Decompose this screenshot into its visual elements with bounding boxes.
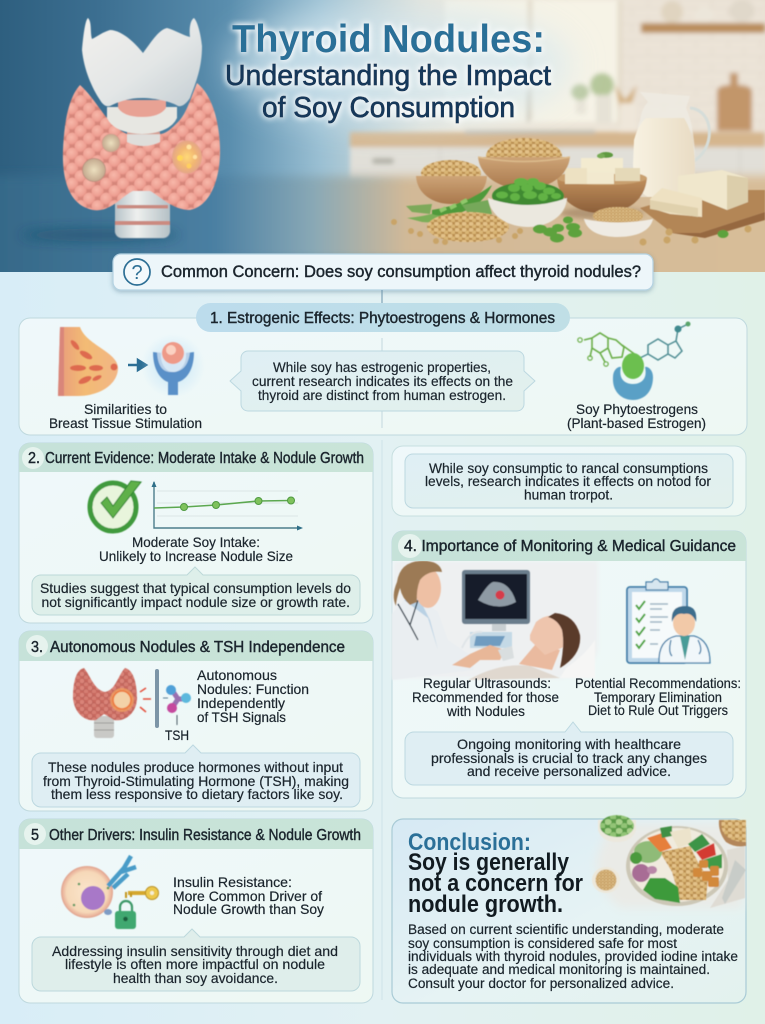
bean pile xyxy=(427,212,509,242)
panel 4: monitoring xyxy=(392,531,746,798)
panel: repeated soy note: While soy consumptic to rancal consumptions xyxy=(429,461,708,476)
callout: lifestyle is often more impactful on nodule xyxy=(65,957,325,972)
callout: These nodules produce hormones without input xyxy=(48,760,343,775)
icon: clipboard and doctor xyxy=(627,579,710,663)
callout xyxy=(32,567,360,615)
callout: health than soy avoidance. xyxy=(113,971,278,986)
heading 1: 1. Estrogenic Effects: Phytoestrogens & Hormones xyxy=(210,310,555,327)
heading 2 xyxy=(19,443,373,472)
heading 1 xyxy=(196,303,570,332)
hero image: thyroid and soy foods xyxy=(0,0,765,272)
panel: repeated soy note xyxy=(392,446,746,516)
monitor xyxy=(462,570,530,624)
label: insulin resistance: Insulin Resistance: xyxy=(173,875,292,890)
label: breast tissue: Similarities to xyxy=(84,402,167,417)
probe xyxy=(498,646,514,661)
callout xyxy=(32,929,360,991)
label: autonomous nodules: Independently xyxy=(197,696,285,711)
icon: breast tissue xyxy=(58,327,118,396)
pods xyxy=(406,185,492,222)
callout: them less responsive to dietary factors like soy. xyxy=(51,787,343,802)
common concern banner xyxy=(113,254,653,290)
common concern banner: Common Concern: Does soy consumption affect thyroid nodules? xyxy=(161,262,641,281)
milk pitcher xyxy=(690,108,709,162)
thyroid illustration xyxy=(20,18,230,241)
icon: TSH molecule xyxy=(163,685,191,725)
label: autonomous nodules: of TSH Signals xyxy=(197,710,286,725)
conclusion body: individuals with thyroid nodules, provided iodine intake xyxy=(408,949,738,964)
soybean bowl large xyxy=(478,138,570,189)
callout: not significantly impact nodule size or growth rate. xyxy=(42,595,350,610)
conclusion heading: Conclusion: xyxy=(408,829,531,856)
icon: question mark xyxy=(124,259,150,285)
food plate image xyxy=(592,815,746,908)
callout: and receive personalized advice. xyxy=(467,764,671,779)
conclusion heading: nodule growth. xyxy=(408,891,563,918)
callout xyxy=(405,722,733,785)
label: ultrasounds: Recommended for those xyxy=(412,690,559,705)
heading 3: 3. xyxy=(31,639,43,656)
callout: from Thyroid-Stimulating Hormone (TSH), making xyxy=(43,774,349,789)
heading 5: 5 xyxy=(31,827,39,844)
panel 1: estrogenic effects xyxy=(19,303,747,435)
blocking bar xyxy=(155,669,159,728)
panel: conclusion xyxy=(392,815,746,1003)
title: of Soy Consumption xyxy=(262,92,515,124)
panel 2: current evidence xyxy=(19,443,373,623)
heading 5: Other Drivers: Insulin Resistance & Nodule Growth xyxy=(49,827,361,844)
conclusion body: Based on current scientific understanding, moderate xyxy=(408,922,724,937)
panel 3: autonomous nodules xyxy=(19,631,373,811)
callout: soy properties: current research indicates its effects on the xyxy=(252,374,513,389)
ultrasound photo xyxy=(392,561,598,680)
conclusion body: Consult your doctor for personalized advice. xyxy=(408,976,674,991)
nodules xyxy=(82,158,106,182)
small flour bowl xyxy=(584,207,653,237)
callout: soy properties: While soy has estrogenic properties, xyxy=(273,360,491,375)
label: recommendations: Diet to Rule Out Triggers xyxy=(588,703,728,718)
caption: Unlikely to Increase Nodule Size xyxy=(99,549,293,564)
conclusion body: soy consumption is considered safe for most xyxy=(408,936,677,951)
conclusion body: is adequate and medical monitoring is maintained. xyxy=(408,962,710,977)
icon: thyroid with autonomous nodule xyxy=(73,668,151,738)
ultrasound machine xyxy=(470,632,512,648)
label: insulin resistance: Nodule Growth than Soy xyxy=(173,902,324,917)
lobes xyxy=(62,82,221,212)
conclusion heading xyxy=(408,829,583,918)
thyroid cartilage xyxy=(82,18,202,106)
callout xyxy=(32,745,360,807)
conclusion heading: Soy is generally xyxy=(408,849,570,876)
label: autonomous nodules: Nodules: Function xyxy=(197,682,309,697)
panel: repeated soy note: human trorpot. xyxy=(524,488,613,502)
heading 2: 2. xyxy=(28,450,40,467)
callout: soy properties: thyroid are distinct from human estrogen. xyxy=(258,388,506,403)
tofu bowl xyxy=(557,152,647,219)
heading 4 xyxy=(392,531,746,561)
heading 2: Current Evidence: Moderate Intake & Nodule Growth xyxy=(45,450,364,467)
callout: Ongoing monitoring with healthcare xyxy=(457,737,681,752)
conclusion heading: not a concern for xyxy=(408,870,583,897)
title: Understanding the Impact xyxy=(225,60,551,92)
callout: Studies suggest that typical consumption levels do xyxy=(40,581,351,596)
soy foods illustration xyxy=(391,92,765,246)
label: soy phytoestrogens: (Plant-based Estrogen) xyxy=(567,416,706,431)
label: insulin resistance: More Common Driver of xyxy=(173,889,322,904)
label: recommendations xyxy=(575,676,741,718)
caption: Moderate Soy Intake: xyxy=(132,535,260,550)
scattered edamame xyxy=(533,216,728,242)
tofu block xyxy=(650,170,748,217)
panel 5: other drivers xyxy=(19,819,373,1003)
callout: Addressing insulin sensitivity through diet and xyxy=(52,944,338,959)
heading 4: Importance of Monitoring & Medical Guidance xyxy=(422,538,736,555)
label: breast tissue xyxy=(49,402,202,431)
label: TSH: TSH xyxy=(165,728,189,743)
label: ultrasounds xyxy=(412,676,559,719)
label: recommendations: Potential Recommendations: xyxy=(575,676,741,691)
heading 5 xyxy=(19,819,373,849)
line chart xyxy=(152,481,303,530)
title: Thyroid Nodules: xyxy=(232,18,545,61)
label: breast tissue: Breast Tissue Stimulation xyxy=(49,416,202,431)
icon: phytoestrogen molecule xyxy=(578,322,690,400)
patient xyxy=(468,665,560,680)
edamame bowl xyxy=(488,178,567,227)
caption xyxy=(99,535,293,564)
label: ultrasounds: with Nodules xyxy=(446,704,525,719)
label: ultrasounds: Regular Ultrasounds: xyxy=(423,676,551,691)
trachea xyxy=(115,190,170,238)
cutting board xyxy=(640,190,765,233)
heading 3 xyxy=(19,631,373,661)
label: insulin resistance xyxy=(173,875,324,917)
larynx rings xyxy=(127,132,160,146)
label: soy phytoestrogens xyxy=(567,402,706,431)
label: recommendations: Temporary Elimination xyxy=(594,690,722,705)
icon: question mark: ? xyxy=(131,262,143,284)
title xyxy=(225,18,551,124)
soybean bowl small xyxy=(416,160,487,204)
heading 3: Autonomous Nodules & TSH Independence xyxy=(50,639,345,656)
label: soy phytoestrogens: Soy Phytoestrogens xyxy=(576,402,698,417)
icon: cell with receptor, key and lock xyxy=(62,856,158,929)
kitchen background xyxy=(350,0,765,179)
heading 4: 4. xyxy=(404,538,417,555)
label: autonomous nodules xyxy=(197,668,309,725)
callout: professionals is crucial to track any changes xyxy=(431,751,707,766)
icon: hormone receptor xyxy=(141,334,205,398)
label: autonomous nodules: Autonomous xyxy=(197,668,277,683)
conclusion body xyxy=(408,922,738,991)
arrow xyxy=(128,360,146,370)
panel: repeated soy note: levels, research indicates it effects on notod for xyxy=(425,474,711,489)
doctor xyxy=(392,598,474,680)
icon: green check xyxy=(90,481,141,531)
callout: soy properties xyxy=(230,351,535,411)
